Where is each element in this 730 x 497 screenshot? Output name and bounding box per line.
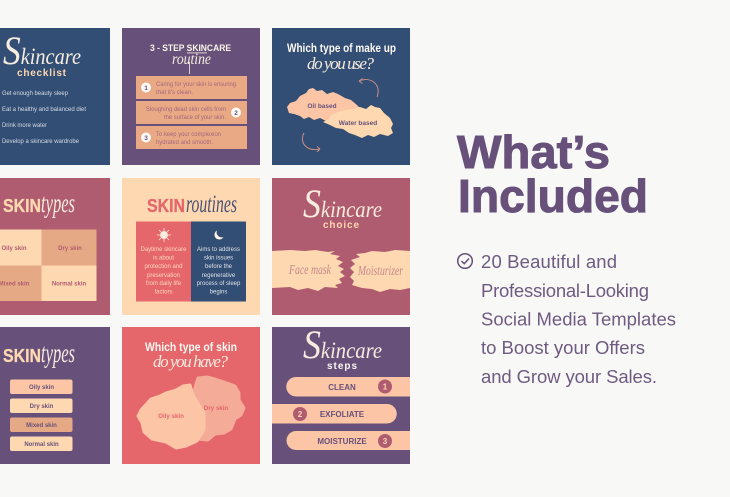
step 3: hydrated and smooth. <box>156 140 213 146</box>
checklist items: Develop a skincare wardrobe <box>2 138 79 145</box>
checklist items: Get enough beauty sleep <box>2 90 68 97</box>
icon: check circle <box>458 254 472 268</box>
brush shape: left <box>272 250 345 291</box>
step: exfoliate: 2 <box>298 410 303 419</box>
night column <box>191 222 246 302</box>
button labels <box>24 385 59 448</box>
step: clean: 1 <box>383 382 388 392</box>
panel: 3-step skincare routine <box>122 28 260 165</box>
step: moisturize <box>286 431 410 450</box>
panel: which type of skin <box>122 327 260 464</box>
step 1: 1 <box>144 85 148 92</box>
script: types: types <box>41 188 75 218</box>
subtitle: steps: steps <box>327 361 357 372</box>
step: exfoliate: EXFOLIATE <box>320 410 365 419</box>
script title: Skincare: Skincare <box>303 322 382 367</box>
heading: Which type of skin <box>145 340 237 354</box>
step 2: 2 <box>234 110 238 117</box>
icon: sun <box>157 228 171 242</box>
panel: skincare checklist <box>0 28 110 165</box>
body text <box>481 251 676 387</box>
grid labels: Dry skin <box>58 246 82 252</box>
grid cell: oily <box>0 230 42 266</box>
step: moisturize: MOISTURIZE <box>317 437 367 446</box>
day column: factors <box>154 290 173 296</box>
step 2: the surface of your skin. <box>164 115 226 121</box>
panel: skin types list <box>0 327 110 464</box>
blob: oily skin <box>138 385 204 448</box>
step: clean <box>286 377 410 396</box>
step: moisturize: 3 <box>383 437 388 446</box>
script subtitle: do you use: do you use? <box>307 54 374 73</box>
body text: Social Media Templates <box>481 308 676 330</box>
panel: make up type <box>272 28 410 165</box>
step 3 <box>136 126 247 149</box>
title: What's Included <box>457 126 648 222</box>
icon: moon <box>214 230 224 240</box>
script: types: types <box>41 338 75 368</box>
label: moisturizer: Moisturizer <box>357 264 403 279</box>
step: exfoliate <box>272 404 397 424</box>
grid cell: normal <box>42 266 96 301</box>
night column: regenerative <box>202 273 236 279</box>
button labels: Normal skin <box>24 442 59 448</box>
body text: to Boost your Offers <box>481 337 645 358</box>
step 2: Sloughing dead skin cells from <box>146 107 226 113</box>
arrow: top right <box>359 78 378 97</box>
step: clean: CLEAN <box>328 383 356 392</box>
checklist items <box>2 90 86 145</box>
step 1 <box>136 76 247 99</box>
title: What's Included: What’s <box>457 126 610 178</box>
grid labels <box>0 246 86 288</box>
label: face mask: Face mask <box>288 263 332 278</box>
body text: Professional-Looking <box>481 280 649 301</box>
panel: skincare steps <box>272 322 410 464</box>
night column: Aims to address <box>197 247 240 253</box>
button: oily skin <box>10 380 72 394</box>
subtitle: choice: choice <box>323 220 359 231</box>
step 1: that it's clean. <box>156 90 193 96</box>
button labels: Oily skin <box>29 385 54 391</box>
heading: skin: SKIN <box>3 346 41 366</box>
brush shape: water based <box>323 105 393 138</box>
day column: Daytime skincare <box>140 247 187 253</box>
label: oily skin: Oily skin <box>158 413 184 420</box>
heading: skin: SKIN <box>3 196 41 216</box>
arrow: bottom left <box>302 133 320 152</box>
night column: skin issues <box>204 256 233 262</box>
button: mixed skin <box>10 418 72 432</box>
grid labels: Oily skin <box>1 246 27 252</box>
brush shape: right <box>350 250 410 292</box>
title: What's Included: Included <box>458 170 648 222</box>
night column: process of sleep <box>197 281 241 287</box>
script title: Skincare: Skincare <box>3 28 81 73</box>
day column: preservation <box>147 273 180 279</box>
body text: and Grow your Sales. <box>481 366 657 387</box>
step 2 <box>136 101 247 124</box>
checklist items: Eat a healthy and balanced diet <box>2 106 86 113</box>
step 3: To keep your complexion <box>156 132 221 138</box>
script subtitle: routine: routine <box>172 51 211 68</box>
label: water based: Water based <box>339 120 377 127</box>
panel: skincare choice <box>272 178 410 315</box>
heading: which type of make up: Which type of make up <box>287 41 396 55</box>
script subtitle: do you have? <box>153 352 228 371</box>
heading: skin: SKIN <box>147 196 185 216</box>
heading: 3 - step skincare: 3 - STEP SKINCARE <box>150 43 231 54</box>
step 1: Caring for your skin is ensuring <box>156 82 236 88</box>
brush shape: oil based <box>287 88 360 121</box>
day column: from daily life <box>146 281 182 287</box>
button labels: Mixed skin <box>26 423 57 429</box>
script title: Skincare: Skincare <box>303 181 382 226</box>
checklist items: Drink more water <box>2 122 47 129</box>
button: dry skin <box>10 398 72 413</box>
day column <box>136 222 191 302</box>
subtitle: checklist: checklist <box>17 68 67 79</box>
grid cell: dry <box>42 230 96 266</box>
step 3: 3 <box>144 135 148 142</box>
grid cell: mixed <box>0 266 42 301</box>
grid labels: Normal skin <box>52 282 86 288</box>
day column: protection and <box>144 264 183 270</box>
day column: is about <box>153 256 174 262</box>
button labels: Dry skin <box>30 404 54 410</box>
button: normal skin <box>10 436 72 451</box>
panel: skin routines <box>122 178 260 315</box>
night column: begins <box>210 290 227 296</box>
label: oil based: Oil based <box>307 103 337 110</box>
body text: 20 Beautiful and <box>481 251 617 272</box>
script: routines: routines <box>186 191 237 218</box>
label: dry skin: Dry skin <box>204 405 228 412</box>
panel: skin types grid <box>0 178 110 315</box>
blob: dry skin <box>192 377 244 440</box>
night column: before the <box>205 264 233 270</box>
